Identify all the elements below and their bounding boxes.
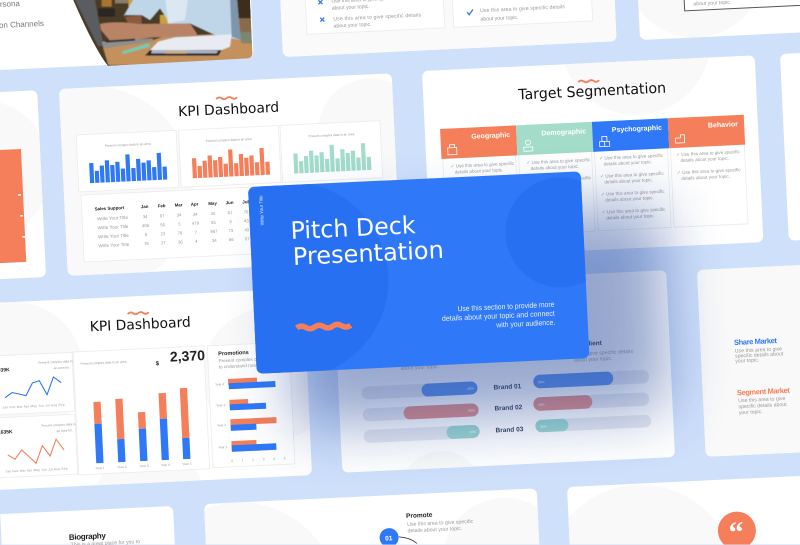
panel: right edge slide bbox=[780, 38, 800, 241]
sales table: 55 bbox=[211, 220, 217, 225]
sales table: 5 bbox=[178, 221, 181, 227]
text block: promote: Use this area to give specific bbox=[407, 519, 474, 528]
sales table: Apr bbox=[191, 202, 199, 207]
horizontal bar chart: promotions: 4 bbox=[273, 457, 275, 461]
column: Psychographic: Psychographic bbox=[612, 125, 662, 134]
horizontal bar chart: promotions: 1 bbox=[242, 458, 244, 462]
text block: segment market: specific details about bbox=[738, 402, 787, 410]
sales table bbox=[81, 181, 387, 262]
bar chart: orange: Present complex data in an area bbox=[206, 137, 252, 143]
checklist box right: about your topic. bbox=[480, 15, 519, 23]
sales table: 8 bbox=[145, 232, 148, 237]
sales table: Write Your Title bbox=[98, 242, 130, 248]
sales table: 34 bbox=[177, 212, 182, 218]
description: Use this section to provide more bbox=[457, 300, 555, 313]
sales table: Write Your Title bbox=[97, 215, 128, 221]
panel: brand comparison slide: Use this area to give specific details bbox=[550, 349, 634, 359]
horizontal bar chart: promotions: 0 bbox=[231, 459, 233, 463]
sales table: 78 bbox=[144, 241, 149, 246]
stacked bar chart: Year 3 bbox=[139, 464, 149, 468]
panel: quote slide bbox=[567, 475, 800, 545]
checklist box right: Use this area to give specific details bbox=[480, 4, 566, 14]
text block: share market: Share Market bbox=[734, 336, 778, 347]
accent wave bbox=[579, 80, 599, 83]
column: Behavior: details about your topic. bbox=[681, 174, 730, 181]
sales table: Jul bbox=[242, 199, 249, 204]
sales table: Feb bbox=[158, 203, 166, 208]
column: Behavior: Behavior bbox=[708, 121, 738, 130]
sales table: 76 bbox=[244, 209, 249, 214]
sales table: 27 bbox=[161, 240, 166, 245]
bar chart: blue: Present complex data in an area bbox=[105, 142, 151, 148]
line chart: blue: an area for. bbox=[54, 365, 70, 370]
text block: segment market bbox=[737, 386, 791, 416]
checklist box left: Use this area to give specific details bbox=[333, 12, 422, 23]
photo: person working on a laptop bbox=[73, 0, 252, 66]
column: Demographic bbox=[516, 122, 597, 235]
sales table: 34 bbox=[212, 238, 217, 243]
sales table: 36 bbox=[178, 239, 183, 245]
sales table: 73 bbox=[228, 228, 234, 233]
panel: brand comparison slide: about your topic. bbox=[574, 356, 612, 364]
panel: promote slide bbox=[204, 488, 539, 545]
step badge: 01 bbox=[385, 535, 393, 542]
column: Geographic bbox=[440, 125, 521, 238]
line chart: blue: Jan Feb Mar Apr May Jun Jul Aug Sep bbox=[2, 403, 65, 410]
horizontal bar chart: promotions: Promotions bbox=[218, 350, 249, 357]
column: Psychographic bbox=[592, 118, 673, 231]
panel: KPI Dashboard with line and stacked charts bbox=[0, 290, 312, 490]
heading: KPI Dashboard bbox=[89, 315, 191, 335]
panel: KPI Dashboard with bar charts and table bbox=[59, 74, 397, 276]
column: Psychographic: details about your topic. bbox=[605, 195, 654, 203]
panel: brand comparison slide: about your topic. bbox=[400, 364, 439, 372]
bar chart: orange bbox=[179, 126, 281, 187]
horizontal bar chart: promotions: Present complex data bbox=[218, 356, 263, 363]
sales table: 76 bbox=[177, 230, 183, 236]
column: Geographic: ✓ Use this area to give specific bbox=[451, 179, 516, 187]
description bbox=[441, 300, 556, 332]
stacked bar chart bbox=[73, 346, 210, 475]
sales table: 67 bbox=[245, 236, 250, 241]
text block: segment market: Segment Market bbox=[737, 386, 790, 397]
stacked bar chart: Year 1 bbox=[95, 466, 105, 470]
panel: Target Segmentation bbox=[422, 56, 764, 250]
column: Behavior: ✓ Use this area to give specific bbox=[677, 167, 741, 175]
horizontal bar chart: promotions: 5 bbox=[284, 456, 286, 460]
column: Demographic: ✓ Use this area to give specific bbox=[527, 175, 592, 183]
text block: segment market: your topic. bbox=[739, 409, 763, 416]
accent wave bbox=[217, 97, 237, 100]
stacked bar chart: Year 4 bbox=[161, 463, 170, 467]
horizontal bar chart: promotions: to understand now. bbox=[219, 363, 258, 369]
line chart: blue bbox=[0, 352, 75, 415]
horizontal bar chart: promotions: Year 4 bbox=[215, 382, 225, 387]
horizontal bar chart: promotions: Year 3 bbox=[216, 403, 226, 408]
bar chart: mint: Present complex data in an area bbox=[308, 132, 355, 138]
column: Demographic: details about your topic. bbox=[531, 164, 579, 171]
sales table: May bbox=[208, 201, 217, 206]
sales table: 34 bbox=[143, 214, 148, 219]
text block: promote: details about your topic. bbox=[407, 526, 462, 534]
brand labels: Brand 01 bbox=[493, 383, 522, 391]
column: Psychographic: details about your topic. bbox=[606, 213, 655, 220]
stacked bar chart: Year 5 bbox=[182, 462, 192, 466]
heading: KPI Dashboard bbox=[178, 100, 279, 120]
left bars: 80% bbox=[468, 408, 475, 413]
line chart: blue: Present complex data in bbox=[38, 359, 73, 365]
sales table: 7 bbox=[195, 230, 198, 235]
column: Psychographic: details about your topic. bbox=[603, 159, 652, 167]
right bars: 30% bbox=[540, 425, 547, 429]
column: Behavior: details about your topic. bbox=[680, 156, 729, 163]
text block: share market: Use this area to give bbox=[735, 346, 782, 355]
description: with your audience. bbox=[495, 318, 555, 329]
checklist box right bbox=[449, 0, 593, 27]
description: details about your topic and connect bbox=[442, 309, 556, 323]
sales table: 56 bbox=[160, 222, 166, 227]
vertical label: Write Your Title bbox=[258, 195, 266, 225]
left bars: 20% bbox=[469, 430, 476, 434]
line chart: orange: Present complex data in bbox=[41, 422, 76, 428]
checklist box left: about your topic. bbox=[333, 22, 372, 30]
column: Psychographic: ✓ Use this area to give specific bbox=[599, 153, 664, 161]
column: Geographic: Geographic bbox=[471, 132, 510, 141]
sales table: Write Your Title bbox=[98, 233, 129, 239]
column: Psychographic: ✓ Use this area to give specific bbox=[602, 207, 666, 215]
sales table: 86 bbox=[229, 237, 234, 242]
horizontal bar chart: promotions: Year 1 bbox=[218, 445, 227, 449]
column: Demographic: Demographic bbox=[541, 128, 586, 137]
sales table: 867 bbox=[210, 229, 218, 234]
line chart: orange: an area for. bbox=[57, 428, 73, 433]
horizontal bar chart: promotions bbox=[207, 342, 295, 468]
horizontal bar chart: promotions: 3 bbox=[263, 457, 265, 461]
sales table: 43 bbox=[244, 218, 250, 223]
left bars: 40% bbox=[467, 386, 474, 391]
sales table: Sales Support bbox=[95, 205, 125, 211]
line chart: orange: Jan Feb Mar Apr May Jun Jul Aug Sep bbox=[5, 467, 68, 474]
column: Behavior bbox=[668, 115, 749, 227]
panel: biography slide bbox=[0, 506, 175, 545]
left bars bbox=[361, 381, 480, 443]
panel: top-right slide bbox=[638, 0, 800, 40]
checklist box left bbox=[302, 0, 445, 34]
brand labels: Brand 03 bbox=[495, 426, 524, 434]
panel: top-left slide with photo bbox=[0, 0, 254, 70]
sales table: Write Your Title bbox=[97, 224, 129, 230]
text block: promote bbox=[406, 510, 474, 534]
sales table: 4 bbox=[195, 239, 198, 244]
text block: share market bbox=[734, 336, 784, 365]
sales table: 43 bbox=[244, 227, 250, 232]
sales table: 406 bbox=[142, 223, 150, 228]
sales table: Jan bbox=[141, 204, 149, 209]
right bars: 40% bbox=[538, 403, 545, 407]
text block: segment market: Use this area to give bbox=[738, 396, 786, 404]
bar chart: mint bbox=[280, 121, 383, 182]
panel: left slide with orange block bbox=[0, 90, 46, 280]
text block: share market: your topic. bbox=[735, 357, 759, 365]
column: Demographic: ✓ Use this area to give specific bbox=[526, 157, 591, 165]
column: Psychographic: details about your topic. bbox=[604, 177, 653, 185]
brand labels bbox=[493, 383, 524, 434]
stacked bar chart: Year 2 bbox=[117, 465, 127, 469]
sales table: Mar bbox=[175, 202, 183, 208]
column: Psychographic: ✓ Use this area to give specific bbox=[601, 189, 665, 197]
icon: quotation mark bbox=[717, 511, 757, 545]
text block: share market: specific details about bbox=[735, 351, 784, 360]
step badge bbox=[379, 528, 399, 545]
title: Pitch Deck bbox=[290, 211, 416, 245]
horizontal bar chart: promotions: Year 2 bbox=[217, 423, 226, 428]
title: Presentation bbox=[292, 236, 444, 271]
sales table: 3 bbox=[229, 219, 232, 224]
stacked bar chart: $ bbox=[156, 361, 160, 367]
sales table: 34 bbox=[193, 212, 198, 217]
column: Behavior: ✓ Use this area to give specific bbox=[676, 149, 741, 157]
column: Demographic: details about your topic. bbox=[531, 182, 580, 189]
right bars bbox=[532, 370, 652, 433]
line chart: orange bbox=[0, 414, 78, 478]
title bbox=[290, 210, 444, 271]
accent wave bbox=[128, 312, 148, 315]
bar chart: blue bbox=[76, 130, 179, 192]
column: Geographic: details about your topic. bbox=[455, 167, 503, 175]
panel: biography slide: Biography bbox=[69, 531, 107, 542]
panel: main title card bbox=[248, 172, 590, 374]
stacked bar chart: Present complex data in an area bbox=[80, 360, 127, 366]
panel: market slide on the right bbox=[697, 265, 800, 456]
sales table: Jun bbox=[226, 200, 234, 205]
column: Psychographic: ✓ Use this area to give specific bbox=[600, 171, 664, 179]
text block: promote: Promote bbox=[406, 512, 433, 520]
panel: brand comparison slide bbox=[338, 270, 675, 472]
horizontal bar chart: promotions: 2 bbox=[252, 458, 254, 462]
panel: top-middle slide with checklists bbox=[274, 0, 617, 57]
column: Geographic: ✓ Use this area to give specific bbox=[450, 161, 515, 169]
checklist box left: about your topic. bbox=[332, 4, 370, 12]
sales table: 67 bbox=[160, 213, 165, 218]
subheading: client: Ideal Client bbox=[567, 340, 603, 349]
right bars: 85% bbox=[538, 380, 545, 384]
brand labels: Brand 02 bbox=[494, 404, 523, 412]
accent wave bbox=[297, 324, 351, 329]
sales table: 23 bbox=[160, 231, 166, 236]
total value: 2,370 bbox=[170, 347, 205, 365]
heading: Target Segmentation bbox=[517, 81, 666, 104]
shadow of main card bbox=[285, 205, 670, 427]
sales table: 81 bbox=[228, 210, 233, 215]
sales table: 45 bbox=[211, 211, 216, 216]
column: Geographic: details about your topic. bbox=[456, 185, 504, 193]
sales table: 479 bbox=[192, 221, 200, 226]
